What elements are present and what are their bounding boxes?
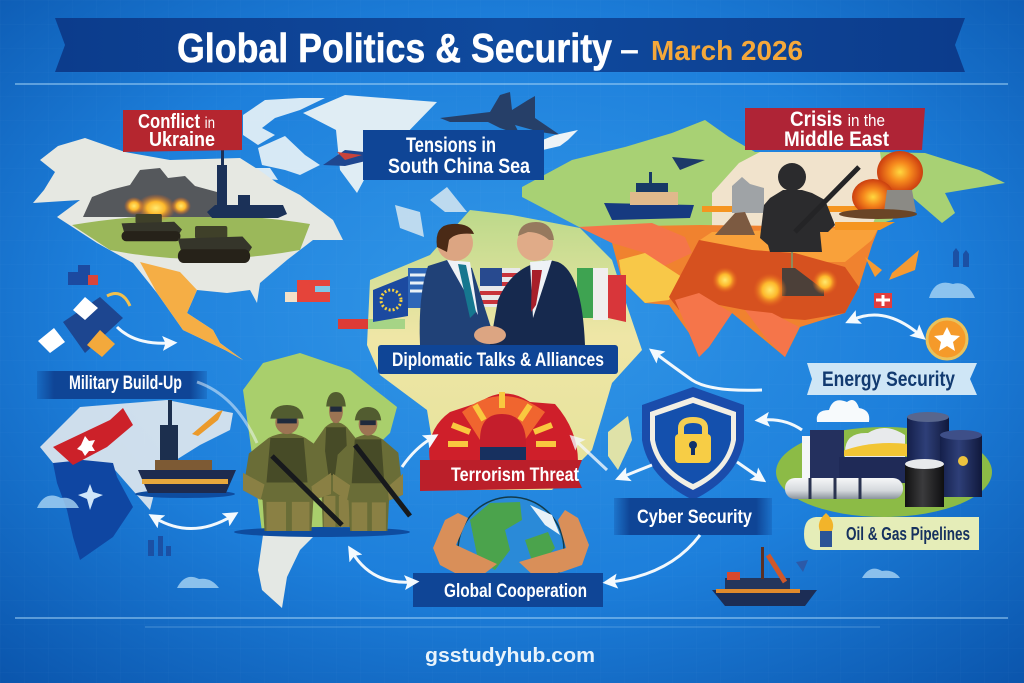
explosion <box>852 151 923 215</box>
label: Terrorism Threat <box>420 460 582 491</box>
panel: terrorism threat <box>420 392 582 491</box>
label: Crisis in the Middle East: Crisis in the <box>790 108 885 131</box>
arrow: cyber left <box>622 465 652 477</box>
label: Terrorism Threat: Terrorism Threat <box>451 465 580 486</box>
landmass: Greenland <box>303 95 437 193</box>
rifles <box>272 445 410 525</box>
landmass: Middle East <box>619 253 682 303</box>
arrow: satellite <box>117 327 170 343</box>
label: Oil and Gas Pipelines <box>804 517 979 550</box>
label: Cyber Security: Cyber Security <box>637 507 752 528</box>
arrow: cooperation to cyber <box>610 535 700 582</box>
landmass: Asia backing <box>579 225 879 357</box>
small jet right <box>518 130 578 153</box>
label: Conflict in Ukraine: Ukraine <box>149 129 215 151</box>
cargo ship <box>712 547 817 606</box>
navy pins <box>148 248 969 556</box>
satellite <box>38 294 130 357</box>
arrow: cyber right <box>737 462 760 478</box>
panel: tensions in South China Sea <box>323 92 578 180</box>
missile <box>192 410 223 436</box>
star on blue land <box>78 484 103 510</box>
label: Cyber Security <box>614 498 772 535</box>
smokestack <box>884 190 916 212</box>
sunburst <box>448 392 556 444</box>
fuel icon <box>819 513 833 547</box>
label: Conflict in Ukraine: Conflict in <box>138 111 215 133</box>
arrow: diplomatic <box>655 353 762 390</box>
soldier <box>243 405 331 531</box>
white refinery clouds <box>845 428 905 470</box>
soldier <box>333 407 403 531</box>
label: Tensions in South China Sea: South China Sea <box>388 155 530 178</box>
cloud <box>817 400 869 422</box>
handshake <box>474 326 506 344</box>
small jet left <box>323 145 390 166</box>
website: gsstudyhub.com <box>425 645 595 667</box>
landmass: South East Asia <box>745 310 799 357</box>
panel: energy security <box>776 293 992 550</box>
title date: March 2026 <box>651 35 803 66</box>
tank <box>122 214 182 241</box>
ship <box>604 172 694 220</box>
landmass: Central Asia <box>579 223 692 267</box>
tank <box>178 226 252 263</box>
burnt ground <box>839 209 917 219</box>
medal <box>927 319 967 359</box>
label: Global Cooperation <box>413 573 603 607</box>
red block building <box>285 280 330 302</box>
explosion <box>124 194 191 222</box>
panel: global cooperation <box>413 497 603 607</box>
fires over Asia <box>712 267 838 307</box>
title: Global Politics & Security <box>177 25 612 71</box>
panel: crisis in the Middle East <box>604 108 925 307</box>
red emblem <box>429 394 578 462</box>
title dash: – <box>620 31 639 69</box>
blocks <box>68 265 98 285</box>
label: Tensions in South China Sea: Tensions in <box>406 134 496 157</box>
arrow: threat <box>575 440 607 470</box>
EU flag <box>373 268 432 322</box>
arrows <box>117 315 920 582</box>
landmass: UK <box>395 187 467 237</box>
label: Military Build-Up <box>37 371 207 399</box>
helmet dome <box>480 414 526 461</box>
orange crown <box>462 396 545 440</box>
right diplomat <box>490 222 585 345</box>
panel: conflict in Ukraine <box>83 110 287 263</box>
boots <box>782 268 824 296</box>
arrow: military ship <box>155 516 232 529</box>
landmass: India <box>675 293 732 357</box>
label: Oil and Gas Pipelines: Oil & Gas Pipelines <box>846 524 970 544</box>
landmass: Mongolia cream <box>712 152 885 232</box>
label: Conflict in Ukraine <box>123 110 242 152</box>
small flag <box>874 293 892 308</box>
padlock <box>675 420 711 463</box>
header banner <box>55 18 965 72</box>
oil field <box>776 427 992 517</box>
label: Diplomatic Talks and Alliances <box>378 345 618 374</box>
world map <box>33 95 1005 608</box>
landmass: Africa and Europe <box>367 210 642 490</box>
yellow spill <box>840 443 908 456</box>
pipeline <box>785 478 903 499</box>
landmass: Korea and Japan <box>865 250 919 280</box>
landmass: South America upper <box>243 353 397 532</box>
label: Tensions in South China Sea <box>363 130 544 180</box>
landmass: Mongolia orange <box>700 227 879 262</box>
arrow: energy medal <box>852 315 920 335</box>
label: Diplomatic Talks and Alliances: Diplomatic Talks & Alliances <box>392 350 604 371</box>
ground shadow <box>234 527 410 537</box>
panel: military build-up <box>37 265 410 537</box>
label: Global Cooperation: Global Cooperation <box>444 581 587 602</box>
armed soldier silhouette <box>760 163 859 272</box>
shield <box>642 387 744 500</box>
landmass: China <box>669 240 859 320</box>
Italy flag <box>577 268 626 322</box>
US flag <box>480 268 520 307</box>
hands <box>433 510 589 577</box>
label: Crisis in the Middle East <box>745 108 925 151</box>
panel: cyber security <box>614 387 772 535</box>
landmass: Arctic islands <box>243 98 325 180</box>
arrow: terror left <box>402 438 432 467</box>
storage tanks <box>802 412 982 507</box>
landmass: South America tip <box>258 533 317 608</box>
landmass: Australia region blue <box>53 460 133 560</box>
landmass: North American plains <box>72 215 310 259</box>
arrow: build-up <box>197 382 257 443</box>
orange plains <box>702 206 895 230</box>
clouds <box>37 283 975 588</box>
landmass: Russia <box>522 120 1005 240</box>
label: Energy Security: Energy Security <box>822 368 955 391</box>
landmass: Australia region pale <box>40 400 233 510</box>
smoke and ruins <box>83 168 217 217</box>
panel: diplomatic talks <box>338 222 626 374</box>
warship <box>207 150 287 218</box>
fighter jet <box>440 92 560 135</box>
soldier <box>310 392 362 527</box>
arrow: to cooperation <box>352 552 412 582</box>
ruined towers <box>732 177 764 213</box>
small plane <box>672 157 705 170</box>
warship <box>135 400 236 498</box>
arrow: oil <box>762 420 802 430</box>
label: Energy Security <box>807 363 977 395</box>
rock <box>715 212 755 235</box>
landmass: Mexico <box>140 262 243 360</box>
left diplomat <box>420 224 495 345</box>
globe <box>458 497 564 603</box>
label: Military Build-Up: Military Build-Up <box>69 373 182 394</box>
landmass: Madagascar <box>608 416 632 470</box>
label: Crisis in the Middle East: Middle East <box>784 128 889 151</box>
red and green bar <box>338 319 368 329</box>
landmass: North America <box>33 138 343 360</box>
red flag badge <box>53 408 133 465</box>
